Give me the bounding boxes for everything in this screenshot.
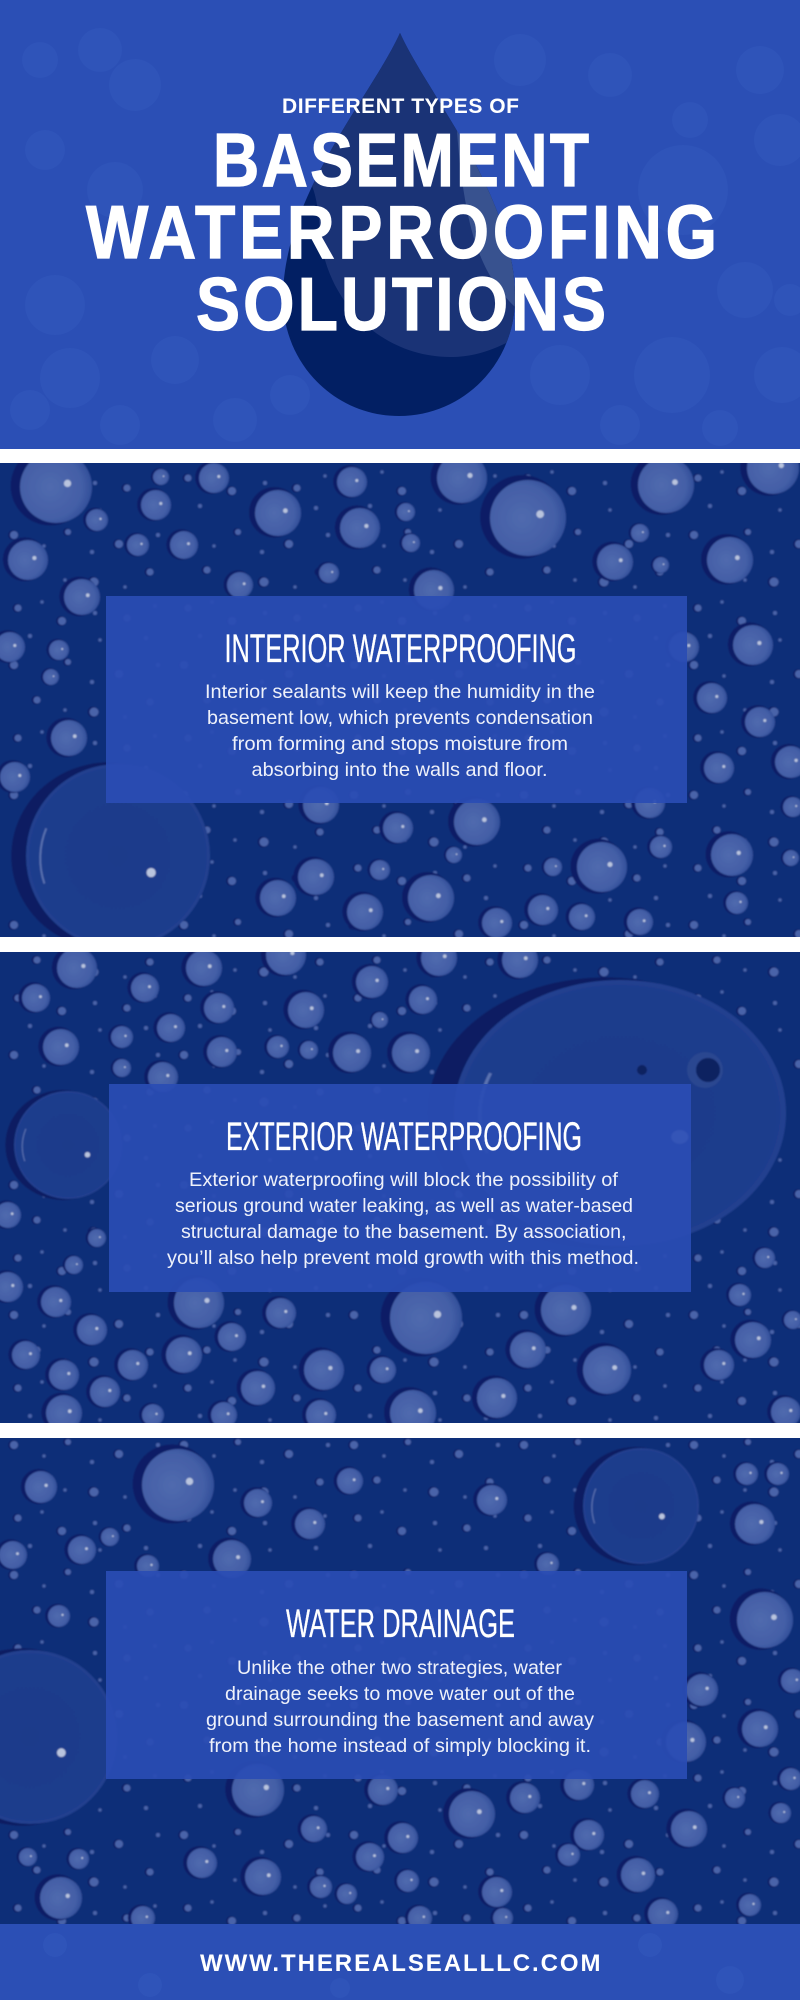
body text: drainage seeks to move water out of the bbox=[225, 1683, 575, 1705]
body text: basement low, which prevents condensation bbox=[207, 707, 593, 729]
website url: WWW.THEREALSEALLLC.COM bbox=[200, 1950, 600, 1977]
panel: exterior waterproofing bbox=[0, 932, 800, 1438]
kicker text: DIFFERENT TYPES OF bbox=[282, 95, 519, 118]
body text: serious ground water leaking, as well as water-based bbox=[175, 1195, 633, 1217]
heading: EXTERIOR WATERPROOFING bbox=[226, 1115, 582, 1159]
title bbox=[86, 118, 717, 346]
body text bbox=[205, 681, 595, 781]
heading: INTERIOR WATERPROOFING bbox=[224, 627, 576, 671]
title: SOLUTIONS bbox=[196, 262, 606, 346]
title: BASEMENT bbox=[213, 118, 589, 202]
body text bbox=[206, 1657, 594, 1757]
body text bbox=[167, 1169, 639, 1269]
body text: from forming and stops moisture from bbox=[232, 733, 568, 755]
title: WATERPROOFING bbox=[86, 190, 717, 274]
body text: Unlike the other two strategies, water bbox=[237, 1657, 563, 1679]
body text: Exterior waterproofing will block the possibility of bbox=[189, 1169, 619, 1191]
panel: interior waterproofing bbox=[0, 439, 800, 950]
body text: structural damage to the basement. By association, bbox=[181, 1221, 626, 1243]
body text: from the home instead of simply blocking it. bbox=[209, 1735, 591, 1757]
body text: absorbing into the walls and floor. bbox=[252, 759, 548, 781]
heading: WATER DRAINAGE bbox=[286, 1602, 515, 1646]
panel: water drainage bbox=[0, 1428, 800, 1934]
body text: ground surrounding the basement and away bbox=[206, 1709, 594, 1731]
text box: interior waterproofing bbox=[106, 596, 687, 803]
footer bbox=[0, 1924, 800, 2000]
body text: Interior sealants will keep the humidity in the bbox=[205, 681, 595, 703]
body text: you’ll also help prevent mold growth with this method. bbox=[167, 1247, 639, 1269]
text box: exterior waterproofing bbox=[109, 1084, 691, 1292]
icon: water drop bbox=[284, 33, 515, 416]
panel: header bbox=[0, 0, 800, 449]
text box: water drainage bbox=[106, 1571, 687, 1779]
